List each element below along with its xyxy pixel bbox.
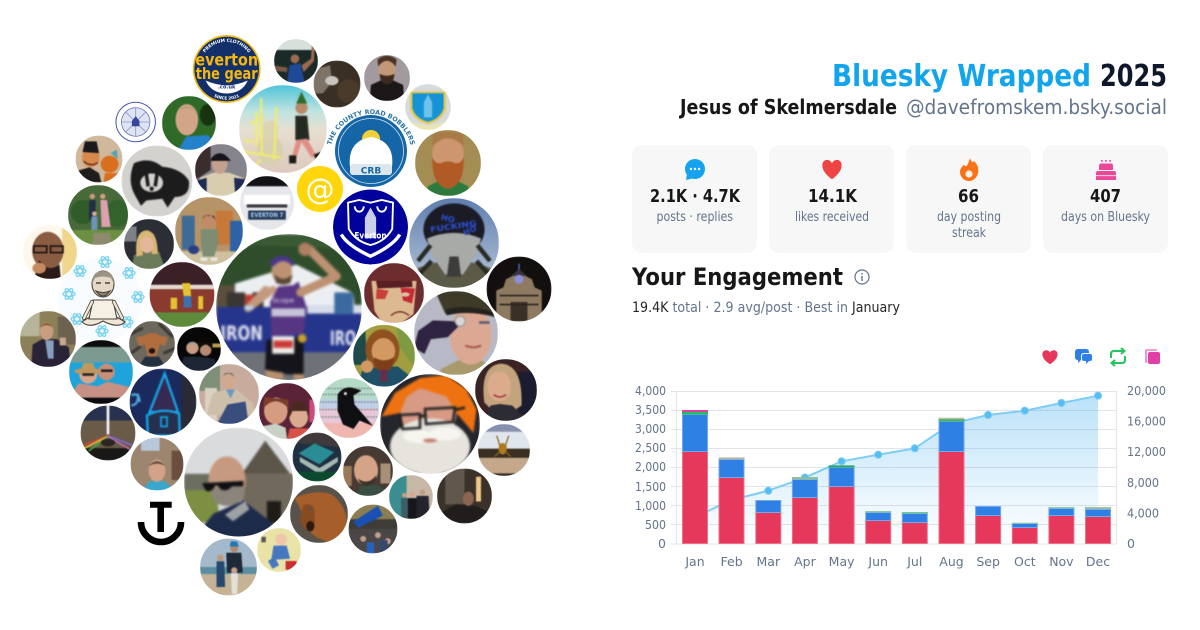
avatar: stadium aerial (292, 432, 342, 482)
avatar: meditating figure with atoms (58, 256, 144, 342)
avatar: car number plate: EVERTON 7 (251, 212, 283, 219)
icon: legend like heart (1042, 350, 1058, 364)
avatar: group of friends (389, 475, 433, 519)
avatar: bald smiling man (343, 446, 393, 496)
panel: posts and replies stat: 2.1K · 4.7K (650, 186, 741, 207)
left y axis labels: 0 (658, 536, 666, 551)
avatar: everton the gear logo: .co.uk (218, 85, 236, 91)
avatar: blonde woman in car (124, 219, 174, 269)
avatar: county road bobblers badge (326, 109, 415, 187)
engagement combo chart (635, 383, 1166, 569)
avatar: family on beach (200, 538, 257, 596)
avatar: wolf (314, 60, 360, 108)
icon: info (855, 270, 869, 284)
icon: birthday cake (1096, 160, 1116, 180)
avatar: couple in pool (69, 340, 133, 404)
avatar: clock tower at night (486, 256, 552, 322)
x axis month labels: Sep (976, 554, 1000, 569)
avatar: car number plate (240, 176, 294, 230)
avatar: pilot helmet: HO (440, 212, 456, 225)
avatar: man in beige jacket (199, 364, 259, 424)
left y axis labels (635, 383, 666, 551)
avatar: man in garden (162, 96, 216, 150)
user name and handle (678, 95, 1167, 119)
avatar: main runner at ironman finish: IRON (220, 322, 263, 345)
right y axis labels: 16,000 (1127, 414, 1166, 429)
avatar: bearded man (364, 55, 410, 101)
icon: anchor smile logo (141, 504, 181, 542)
avatar: crow on pastel text pattern (319, 378, 379, 438)
icon: legend reply bubbles (1075, 349, 1092, 364)
avatar: main runner at ironman finish: Scope (272, 297, 294, 305)
avatar: everton crest blue (333, 190, 408, 264)
panel: posting streak stat: day posting (937, 210, 1001, 225)
left y axis labels: 3,500 (635, 402, 666, 417)
avatar: santa with orange hat (380, 374, 480, 474)
left y axis labels: 1,000 (635, 498, 666, 513)
avatar: dog on rocks (129, 321, 175, 367)
x axis month labels: Nov (1049, 554, 1074, 569)
avatar: main runner at ironman finish: IRO (330, 327, 356, 350)
panel: days on bluesky stat: 407 (1090, 186, 1121, 207)
avatar: bald man with glasses (23, 225, 77, 279)
x axis month labels: Aug (939, 554, 964, 569)
line: cumulative engagement (695, 392, 1102, 517)
icon: lotus figure (82, 271, 125, 325)
left y axis labels: 1,500 (635, 479, 666, 494)
avatar: couple selfie (259, 383, 315, 439)
x axis month labels: Apr (794, 554, 817, 569)
user name and handle: @davefromskem.bsky.social (906, 95, 1167, 119)
panel: likes stat: likes received (795, 210, 869, 225)
panel: likes stat (769, 145, 894, 253)
avatar: cartoon drawing (257, 528, 301, 572)
avatar: pilot helmet: FUCKING (430, 219, 477, 234)
icon: atom ring (63, 256, 144, 337)
avatar: everton the gear logo (192, 35, 261, 103)
avatar: stitched badger (122, 146, 192, 216)
x axis month labels: May (829, 554, 855, 569)
left y axis labels: 2,500 (635, 440, 666, 455)
avatar: astro society emblem (115, 101, 157, 143)
chart legend icons (1042, 348, 1160, 366)
avatar: man with sunglasses and stone pyramid (184, 428, 294, 542)
avatar: monocle officer (414, 291, 498, 375)
avatar: caricature statue (175, 197, 243, 265)
panel: posting streak stat (906, 145, 1031, 253)
text: engagement summary: 19.4K total · 2.9 avg/post · Best in January (632, 300, 900, 316)
x axis month labels: Mar (757, 554, 781, 569)
avatar: main runner at ironman finish (216, 234, 362, 381)
icon: flame (960, 158, 978, 181)
avatar: everton the gear logo: SINCE 2021 (214, 94, 240, 100)
panel: posting streak stat: 66 (958, 186, 979, 207)
left y axis labels: 500 (645, 517, 666, 532)
avatar: ginger bearded man portrait (415, 130, 481, 196)
icon: yellow at-sign avatar (297, 166, 343, 212)
avatar: man on street (130, 438, 184, 490)
x axis month labels: Oct (1014, 554, 1036, 569)
icon: legend copy squares (1146, 350, 1160, 364)
avatar: county road bobblers badge: THE COUNTY ROAD BOBBLERS (326, 109, 415, 144)
panel: posting streak stat: streak (952, 226, 986, 241)
right y axis labels: 8,000 (1127, 475, 1159, 490)
x axis month labels: Jan (684, 554, 705, 569)
avatar: man in dark room with lamp (437, 468, 492, 524)
stacked bars: likes, replies, reposts, quotes (682, 410, 1111, 544)
icon: legend repost arrows (1111, 348, 1125, 366)
avatar: everton the gear logo: PREMIUM CLOTHING (202, 38, 251, 52)
avatar: neon blue house (130, 368, 196, 436)
icon: heart (822, 160, 842, 179)
right y axis labels: 0 (1127, 536, 1135, 551)
avatar: family in garden (68, 185, 130, 245)
left y axis labels: 4,000 (635, 383, 666, 398)
avatar: elf and snowman on beach (239, 85, 327, 173)
title: 2025 (1100, 59, 1167, 94)
avatar: everton the gear logo: the gear (196, 64, 258, 83)
panel: likes stat: 14.1K (808, 186, 858, 207)
panel: posts and replies stat: posts · replies (656, 210, 733, 225)
avatar: pilot helmet (409, 198, 499, 288)
avatar: everton the gear logo: everton (195, 51, 258, 71)
x axis month labels: Dec (1086, 554, 1110, 569)
panel: avatar bubble cluster (20, 35, 552, 596)
title: Bluesky Wrapped (832, 59, 1091, 94)
user name and handle: Jesus of Skelmersdale (678, 95, 897, 119)
avatar: mastiff dog (290, 485, 348, 543)
avatar: puppets (76, 136, 122, 182)
avatar: couple at night (177, 327, 221, 371)
avatar: county road bobblers badge: CRB (361, 166, 381, 176)
left y axis labels: 3,000 (635, 421, 666, 436)
avatar: footballer in stadium (274, 39, 318, 83)
avatar: man in cap (195, 144, 247, 196)
avatar: small everton crest (405, 84, 451, 130)
x axis month labels: Jul (906, 554, 922, 569)
avatar: jesus caricature (353, 325, 415, 387)
icon: chat bubble (685, 159, 705, 180)
avatar: blonde woman (475, 359, 537, 421)
right y axis labels: 12,000 (1127, 444, 1166, 459)
avatar: crowd with blue flag (348, 504, 398, 554)
avatar: everton crest blue: Everton (354, 231, 387, 241)
heading: your engagement: Your Engagement (631, 263, 843, 291)
avatar: football match (150, 262, 214, 327)
left y axis labels: 2,000 (635, 459, 666, 474)
line area: cumulative engagement (695, 396, 1098, 544)
chart gridlines (671, 391, 1116, 544)
avatar: illustrated woman with red face paint (364, 263, 424, 323)
panel: days on bluesky stat (1043, 145, 1168, 253)
x axis month labels: Feb (721, 554, 743, 569)
right y axis labels: 4,000 (1127, 505, 1159, 520)
x axis month labels (684, 554, 1110, 569)
right y axis labels: 20,000 (1127, 383, 1166, 398)
panel: days on bluesky stat: days on Bluesky (1061, 210, 1150, 225)
icon: yellow at-sign avatar: @ (306, 172, 334, 206)
right y axis labels (1127, 383, 1166, 551)
avatar: pilot helmet: HO (461, 223, 478, 238)
x axis month labels: Jun (867, 554, 888, 569)
panel: posts and replies stat (632, 145, 757, 253)
avatar: spider (478, 424, 530, 476)
avatar: rainbow prism (80, 406, 136, 460)
avatar: man in suit (20, 311, 76, 367)
